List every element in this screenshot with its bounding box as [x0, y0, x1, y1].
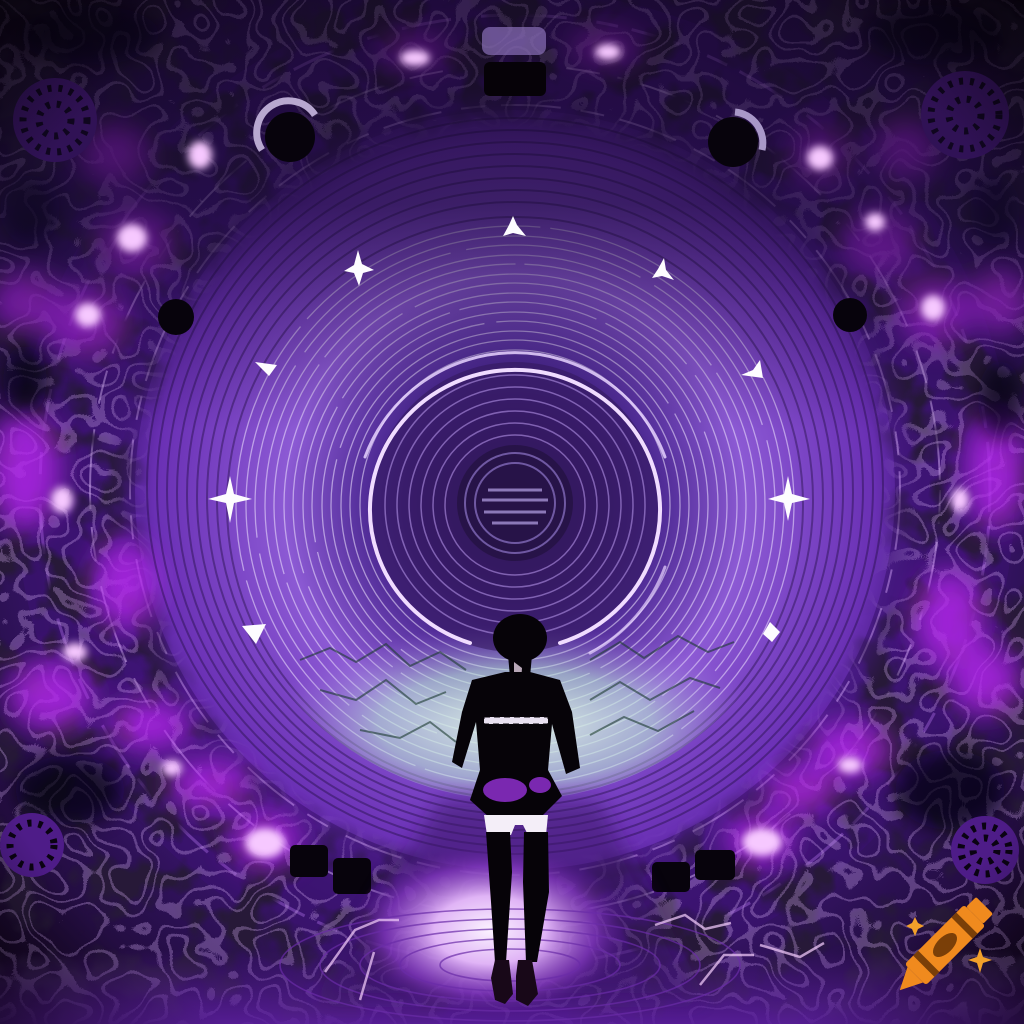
feet [491, 960, 513, 1004]
right lens [708, 112, 763, 167]
icon: sparkle left [906, 917, 924, 936]
star mid right [768, 476, 810, 521]
star mid left [208, 476, 252, 523]
torso and arms [452, 672, 580, 818]
star upper right [652, 258, 674, 280]
flower-like circuit clusters in corners [0, 71, 1019, 884]
dark sockets [158, 298, 867, 894]
left lens [257, 101, 315, 162]
head [493, 614, 547, 662]
star top [503, 216, 526, 236]
icon: crayon logo [889, 895, 995, 1001]
legs [486, 832, 512, 962]
tunnel concentric lines [147, 118, 883, 854]
star right upper [741, 360, 763, 378]
figure: woman walking silhouette [452, 614, 580, 1006]
circuit maze lines [300, 636, 734, 742]
icon: sparkle right [968, 948, 992, 973]
bright main ring [365, 353, 665, 653]
floor ripple lines [280, 909, 740, 1021]
stars [208, 216, 810, 644]
floor walkway [0, 800, 1024, 1024]
waist light band [484, 717, 548, 724]
floor circuit traces [325, 915, 824, 1000]
skirt pattern [483, 777, 551, 802]
white shorts strip [484, 815, 548, 835]
star lower right [763, 622, 780, 642]
neck and ponytail [508, 655, 532, 677]
green glow at the base of the tunnel [292, 635, 737, 797]
bright light cores [51, 44, 969, 858]
star lower left [242, 624, 266, 644]
star left upper [255, 362, 277, 376]
inner concentric rings [385, 375, 645, 635]
central striped orb [482, 490, 548, 523]
star upper left [344, 250, 374, 286]
top machine housing [482, 27, 546, 96]
inner dark core [370, 362, 660, 652]
